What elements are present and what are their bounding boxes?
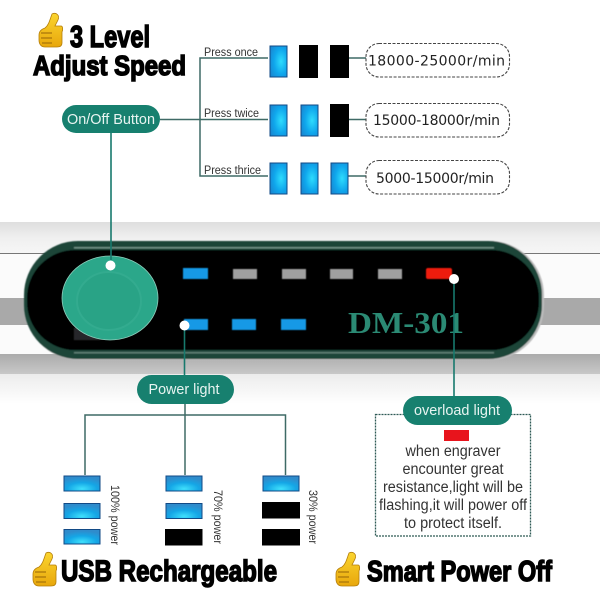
30% power lights <box>262 476 300 546</box>
callout dots <box>106 260 459 330</box>
overload light label: overload light <box>414 403 500 419</box>
press labels: Press twice <box>204 108 259 120</box>
smart power off heading: Smart Power Off <box>367 556 552 588</box>
speed range 5000-15000: 5000-15000r/min <box>376 171 494 187</box>
30% power label: 30% power <box>306 490 318 544</box>
speed range 15000-18000 <box>366 104 510 137</box>
on/off round button <box>62 256 158 340</box>
speed range 5000-15000 <box>366 160 510 194</box>
70% power label: 70% power <box>211 490 223 544</box>
speed level 2 lights <box>270 104 349 137</box>
100% power label: 100% power <box>108 485 120 545</box>
callout lines <box>111 133 454 396</box>
power light label <box>137 375 234 404</box>
speed range 18000-25000: 18000-25000r/min <box>368 54 505 70</box>
overload description <box>379 443 528 532</box>
speed level 3 lights <box>270 163 348 194</box>
thumb icon: title <box>39 13 63 47</box>
red light sample <box>444 430 469 441</box>
power light label: Power light <box>148 382 220 398</box>
title: 3 Level <box>70 19 150 54</box>
button reflection <box>74 328 100 340</box>
device control panel <box>24 241 544 360</box>
press labels <box>204 47 261 177</box>
model label: DM-301 <box>348 305 464 340</box>
thumb icon: USB <box>33 552 57 586</box>
on/off button label <box>62 105 160 133</box>
background bar: metal handle <box>0 222 600 404</box>
overload description: to protect itself. <box>404 515 502 532</box>
title <box>33 19 186 81</box>
overload light label <box>403 396 512 425</box>
overload description: flashing,it will power off <box>379 497 528 514</box>
indicator lights, top row <box>183 268 452 279</box>
overload note box <box>376 414 530 536</box>
on/off button label: On/Off Button <box>67 112 155 128</box>
power tree lines <box>85 404 286 475</box>
press labels: Press once <box>204 47 258 59</box>
overload description: encounter great <box>402 461 504 478</box>
press tree lines <box>160 58 366 176</box>
speed range 18000-25000 <box>366 44 510 77</box>
overload description: resistance,light will be <box>383 479 523 496</box>
title: Adjust Speed <box>33 50 186 81</box>
speed level 1 lights <box>270 45 349 78</box>
press labels: Press thrice <box>204 165 261 177</box>
speed range 15000-18000: 15000-18000r/min <box>373 113 500 129</box>
overload description: when engraver <box>405 443 500 460</box>
indicator lights, bottom row <box>184 319 306 330</box>
100% power lights <box>64 476 100 544</box>
thumb icon: smart power off <box>336 552 360 586</box>
USB rechargeable heading: USB Rechargeable <box>61 555 277 588</box>
70% power lights <box>165 476 202 546</box>
